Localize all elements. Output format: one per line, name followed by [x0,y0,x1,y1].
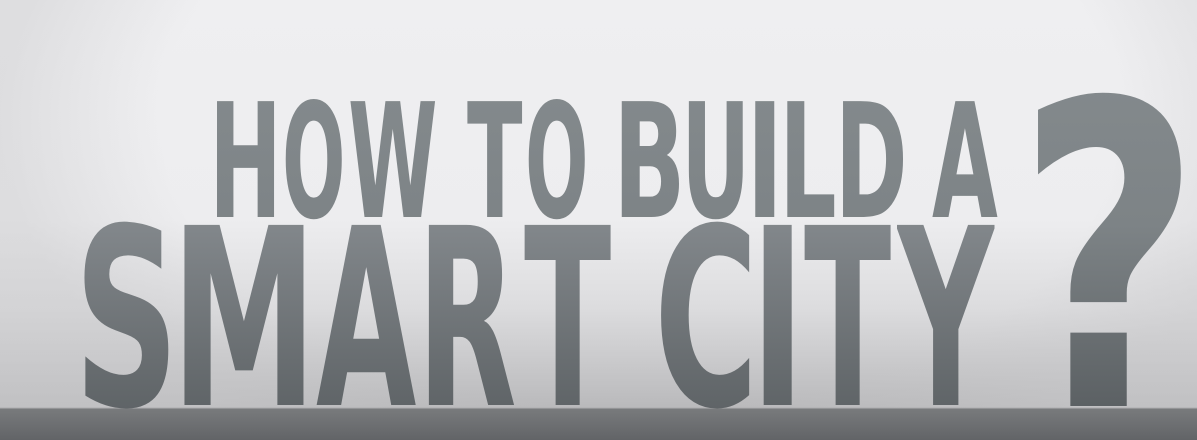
heading line 1: H [209,70,282,255]
heading line 2 [74,92,1181,440]
heading line 1: B [613,70,686,255]
heading line 1: D [835,70,908,255]
heading line 1: T [467,70,523,255]
heading line 1: U [681,70,750,255]
heading line 1: W [348,70,438,255]
heading line 1 [87,70,1181,408]
heading line 1: O [525,70,589,255]
heading line 1: L [779,70,836,255]
heading line 1: A [932,70,997,255]
heading line 1: I [746,70,783,255]
heading line 1: O [282,70,346,255]
